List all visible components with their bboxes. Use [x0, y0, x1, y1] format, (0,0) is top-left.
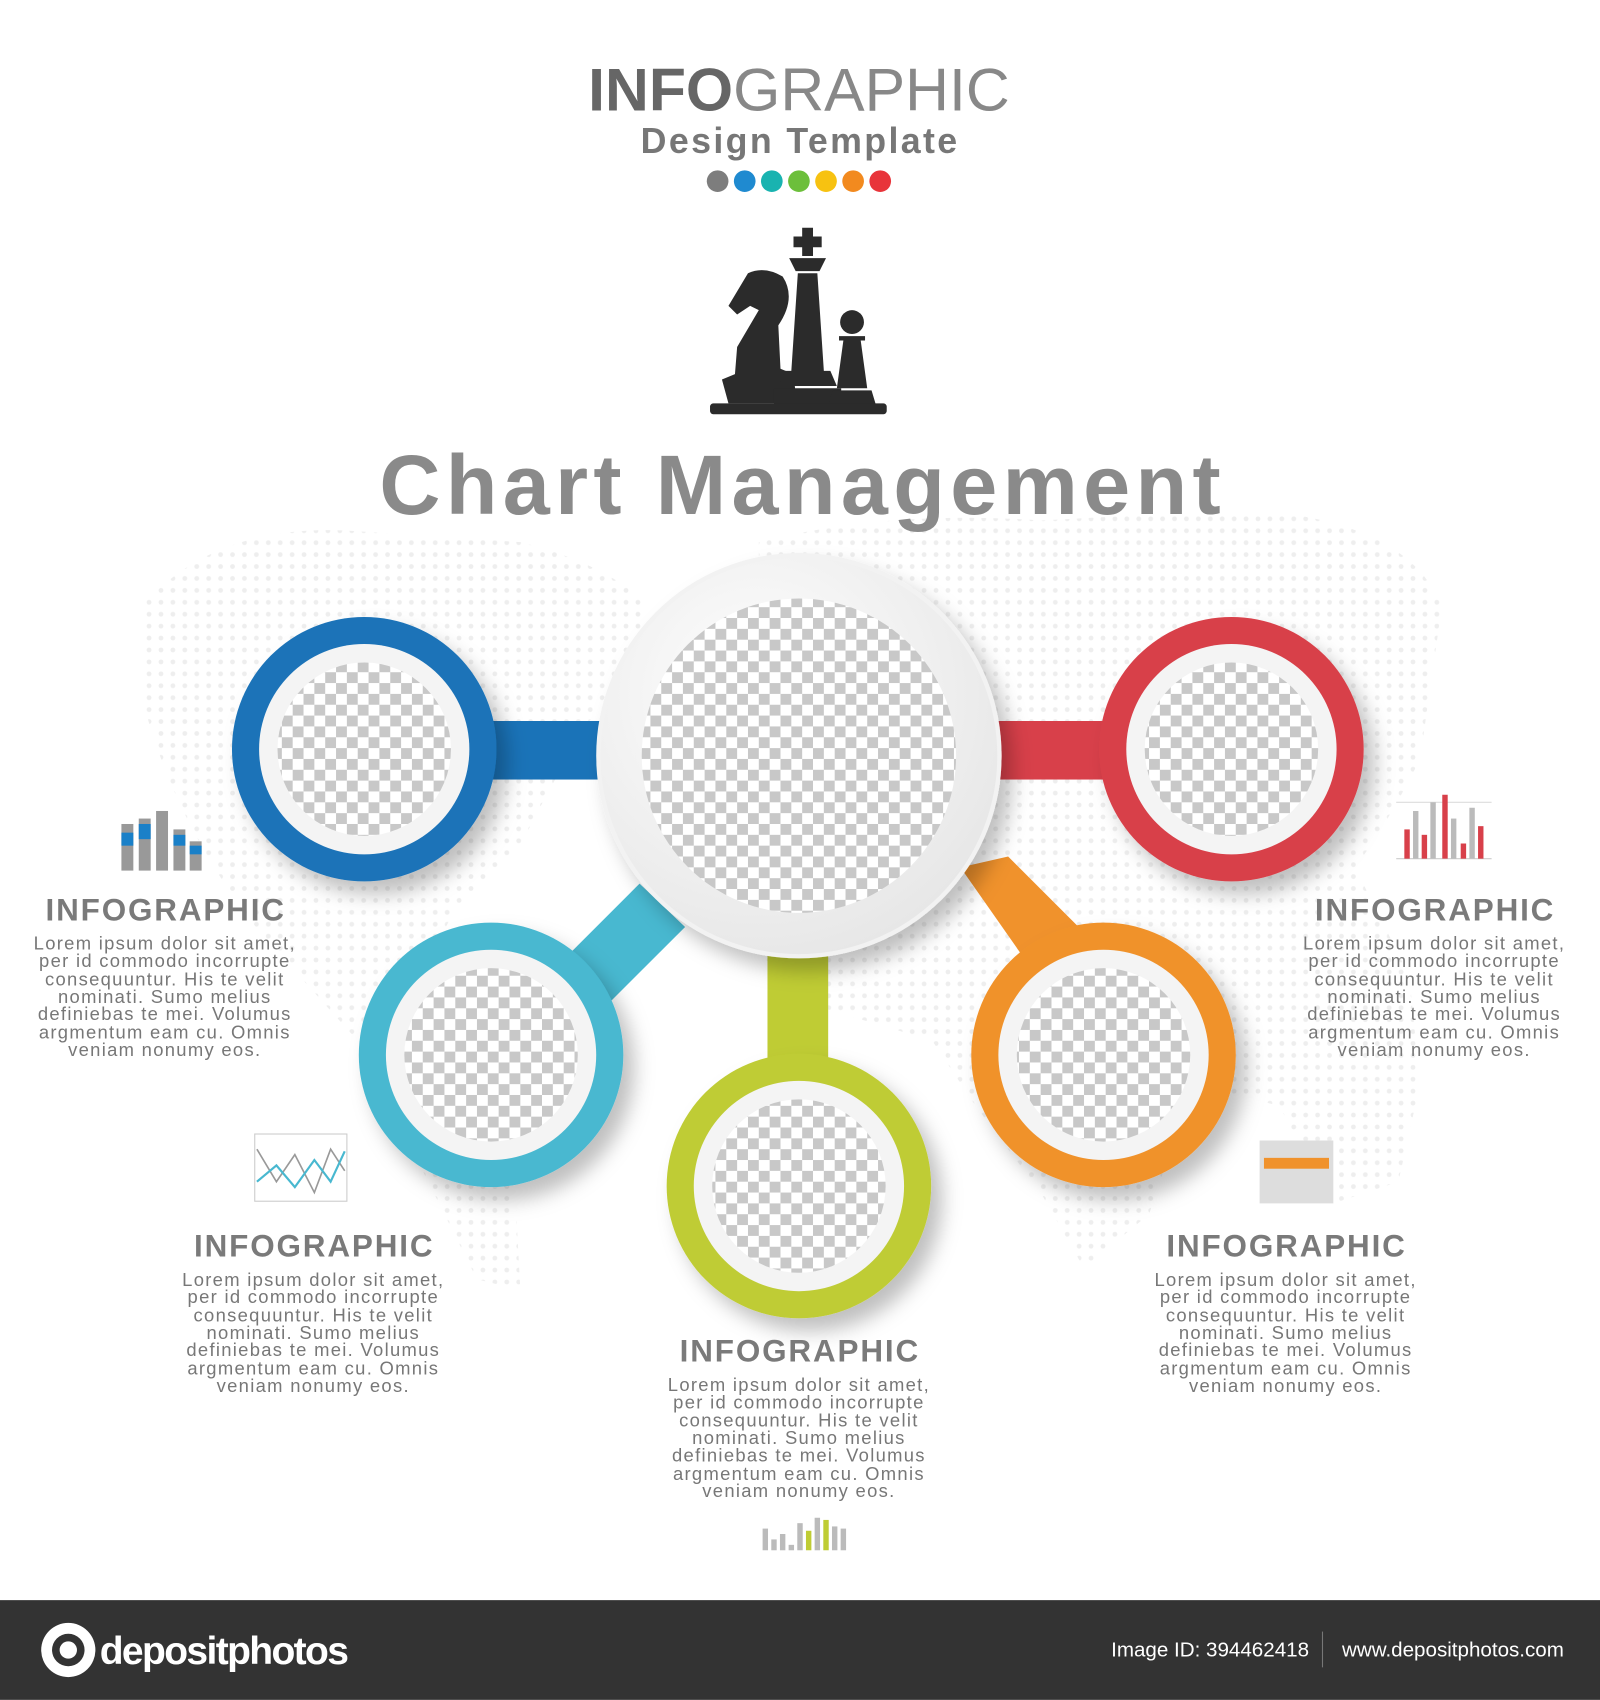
icon: red bar chart	[1396, 795, 1492, 859]
text block: lower right: definiebas te mei. Volumus	[1159, 1339, 1413, 1360]
text block: lower right: argmentum eam cu. Omnis	[1160, 1358, 1412, 1379]
text block: bottom center: per id commodo incorrupte	[673, 1391, 925, 1412]
text block: left: per id commodo incorrupte	[39, 950, 291, 971]
text block: lower right: consequuntur. His te velit	[1166, 1305, 1405, 1326]
text block: right: per id commodo incorrupte	[1308, 950, 1560, 971]
connectors	[477, 721, 1117, 1073]
text block: lower left: INFOGRAPHIC	[194, 1229, 433, 1264]
text block: left: veniam nonumy eos.	[68, 1039, 261, 1060]
heading: Chart Management: Chart Management	[379, 437, 1221, 532]
text block: lower left: Lorem ipsum dolor sit amet,	[182, 1269, 444, 1290]
center circle	[598, 555, 999, 956]
text block: lower right: Lorem ipsum dolor sit amet,	[1155, 1269, 1417, 1290]
text block: bottom center: Lorem ipsum dolor sit amet,	[668, 1374, 930, 1395]
circle: green	[667, 1054, 931, 1318]
text block: right: Lorem ipsum dolor sit amet,	[1303, 933, 1565, 954]
text block: left: consequuntur. His te velit	[45, 969, 285, 990]
text block: lower left: nominati. Sumo melius	[207, 1322, 420, 1343]
text block: lower left: consequuntur. His te velit	[194, 1305, 433, 1326]
text block: right: INFOGRAPHIC	[1315, 892, 1553, 927]
circle: orange	[971, 923, 1236, 1187]
text block: lower left: per id commodo incorrupte	[188, 1286, 439, 1307]
footer bar: Image ID: 394462418	[1111, 1639, 1309, 1662]
text block: bottom center: nominati. Sumo melius	[692, 1427, 906, 1448]
text block: lower left: veniam nonumy eos.	[217, 1375, 410, 1396]
text block: left	[34, 892, 296, 1060]
text block: right: definiebas te mei. Volumus	[1307, 1003, 1561, 1024]
icon: people chart	[1260, 1141, 1333, 1203]
text block: right: consequuntur. His te velit	[1314, 969, 1554, 990]
title: INFOGRAPHIC	[588, 56, 1010, 124]
text block: lower left	[182, 1229, 444, 1396]
text block: bottom center: INFOGRAPHIC	[680, 1334, 918, 1369]
text block: lower left: argmentum eam cu. Omnis	[187, 1358, 439, 1379]
text block: lower right	[1155, 1229, 1417, 1396]
text block: right: argmentum eam cu. Omnis	[1308, 1022, 1560, 1043]
text block: lower right: per id commodo incorrupte	[1160, 1286, 1411, 1307]
icon: line chart	[255, 1134, 347, 1201]
text block: left: Lorem ipsum dolor sit amet,	[34, 933, 296, 954]
text block: lower right: veniam nonumy eos.	[1189, 1375, 1382, 1396]
text block: left: nominati. Sumo melius	[58, 986, 272, 1007]
text block: bottom center: definiebas te mei. Volumus	[672, 1444, 926, 1465]
text block: bottom center: consequuntur. His te velit	[679, 1410, 919, 1431]
title	[588, 56, 1010, 161]
text block: lower left: definiebas te mei. Volumus	[186, 1339, 440, 1360]
footer bar: depositphotos	[100, 1630, 348, 1673]
text block: right: veniam nonumy eos.	[1338, 1039, 1531, 1060]
footer bar: www.depositphotos.com	[1341, 1639, 1564, 1662]
text block: bottom center: veniam nonumy eos.	[702, 1480, 896, 1501]
color dots	[707, 170, 891, 192]
circle: cyan	[359, 923, 623, 1187]
text block: lower right: INFOGRAPHIC	[1166, 1229, 1405, 1264]
circle: blue	[232, 617, 496, 881]
title: Design Template	[641, 121, 957, 161]
icon: chess pieces	[710, 228, 887, 414]
text block: bottom center	[668, 1334, 930, 1501]
text block: bottom center: argmentum eam cu. Omnis	[673, 1463, 925, 1484]
text block: right	[1303, 892, 1565, 1060]
background: dotted world map	[141, 510, 1442, 1290]
circle: red	[1099, 617, 1364, 881]
icon: blue bar chart	[121, 811, 202, 871]
text block: left: definiebas te mei. Volumus	[38, 1003, 292, 1024]
icon: green bar chart	[765, 1518, 843, 1550]
footer bar	[0, 1600, 1600, 1700]
text block: right: nominati. Sumo melius	[1327, 986, 1541, 1007]
text block: left: argmentum eam cu. Omnis	[39, 1022, 291, 1043]
text block: lower right: nominati. Sumo melius	[1179, 1322, 1392, 1343]
text block: left: INFOGRAPHIC	[46, 892, 284, 927]
